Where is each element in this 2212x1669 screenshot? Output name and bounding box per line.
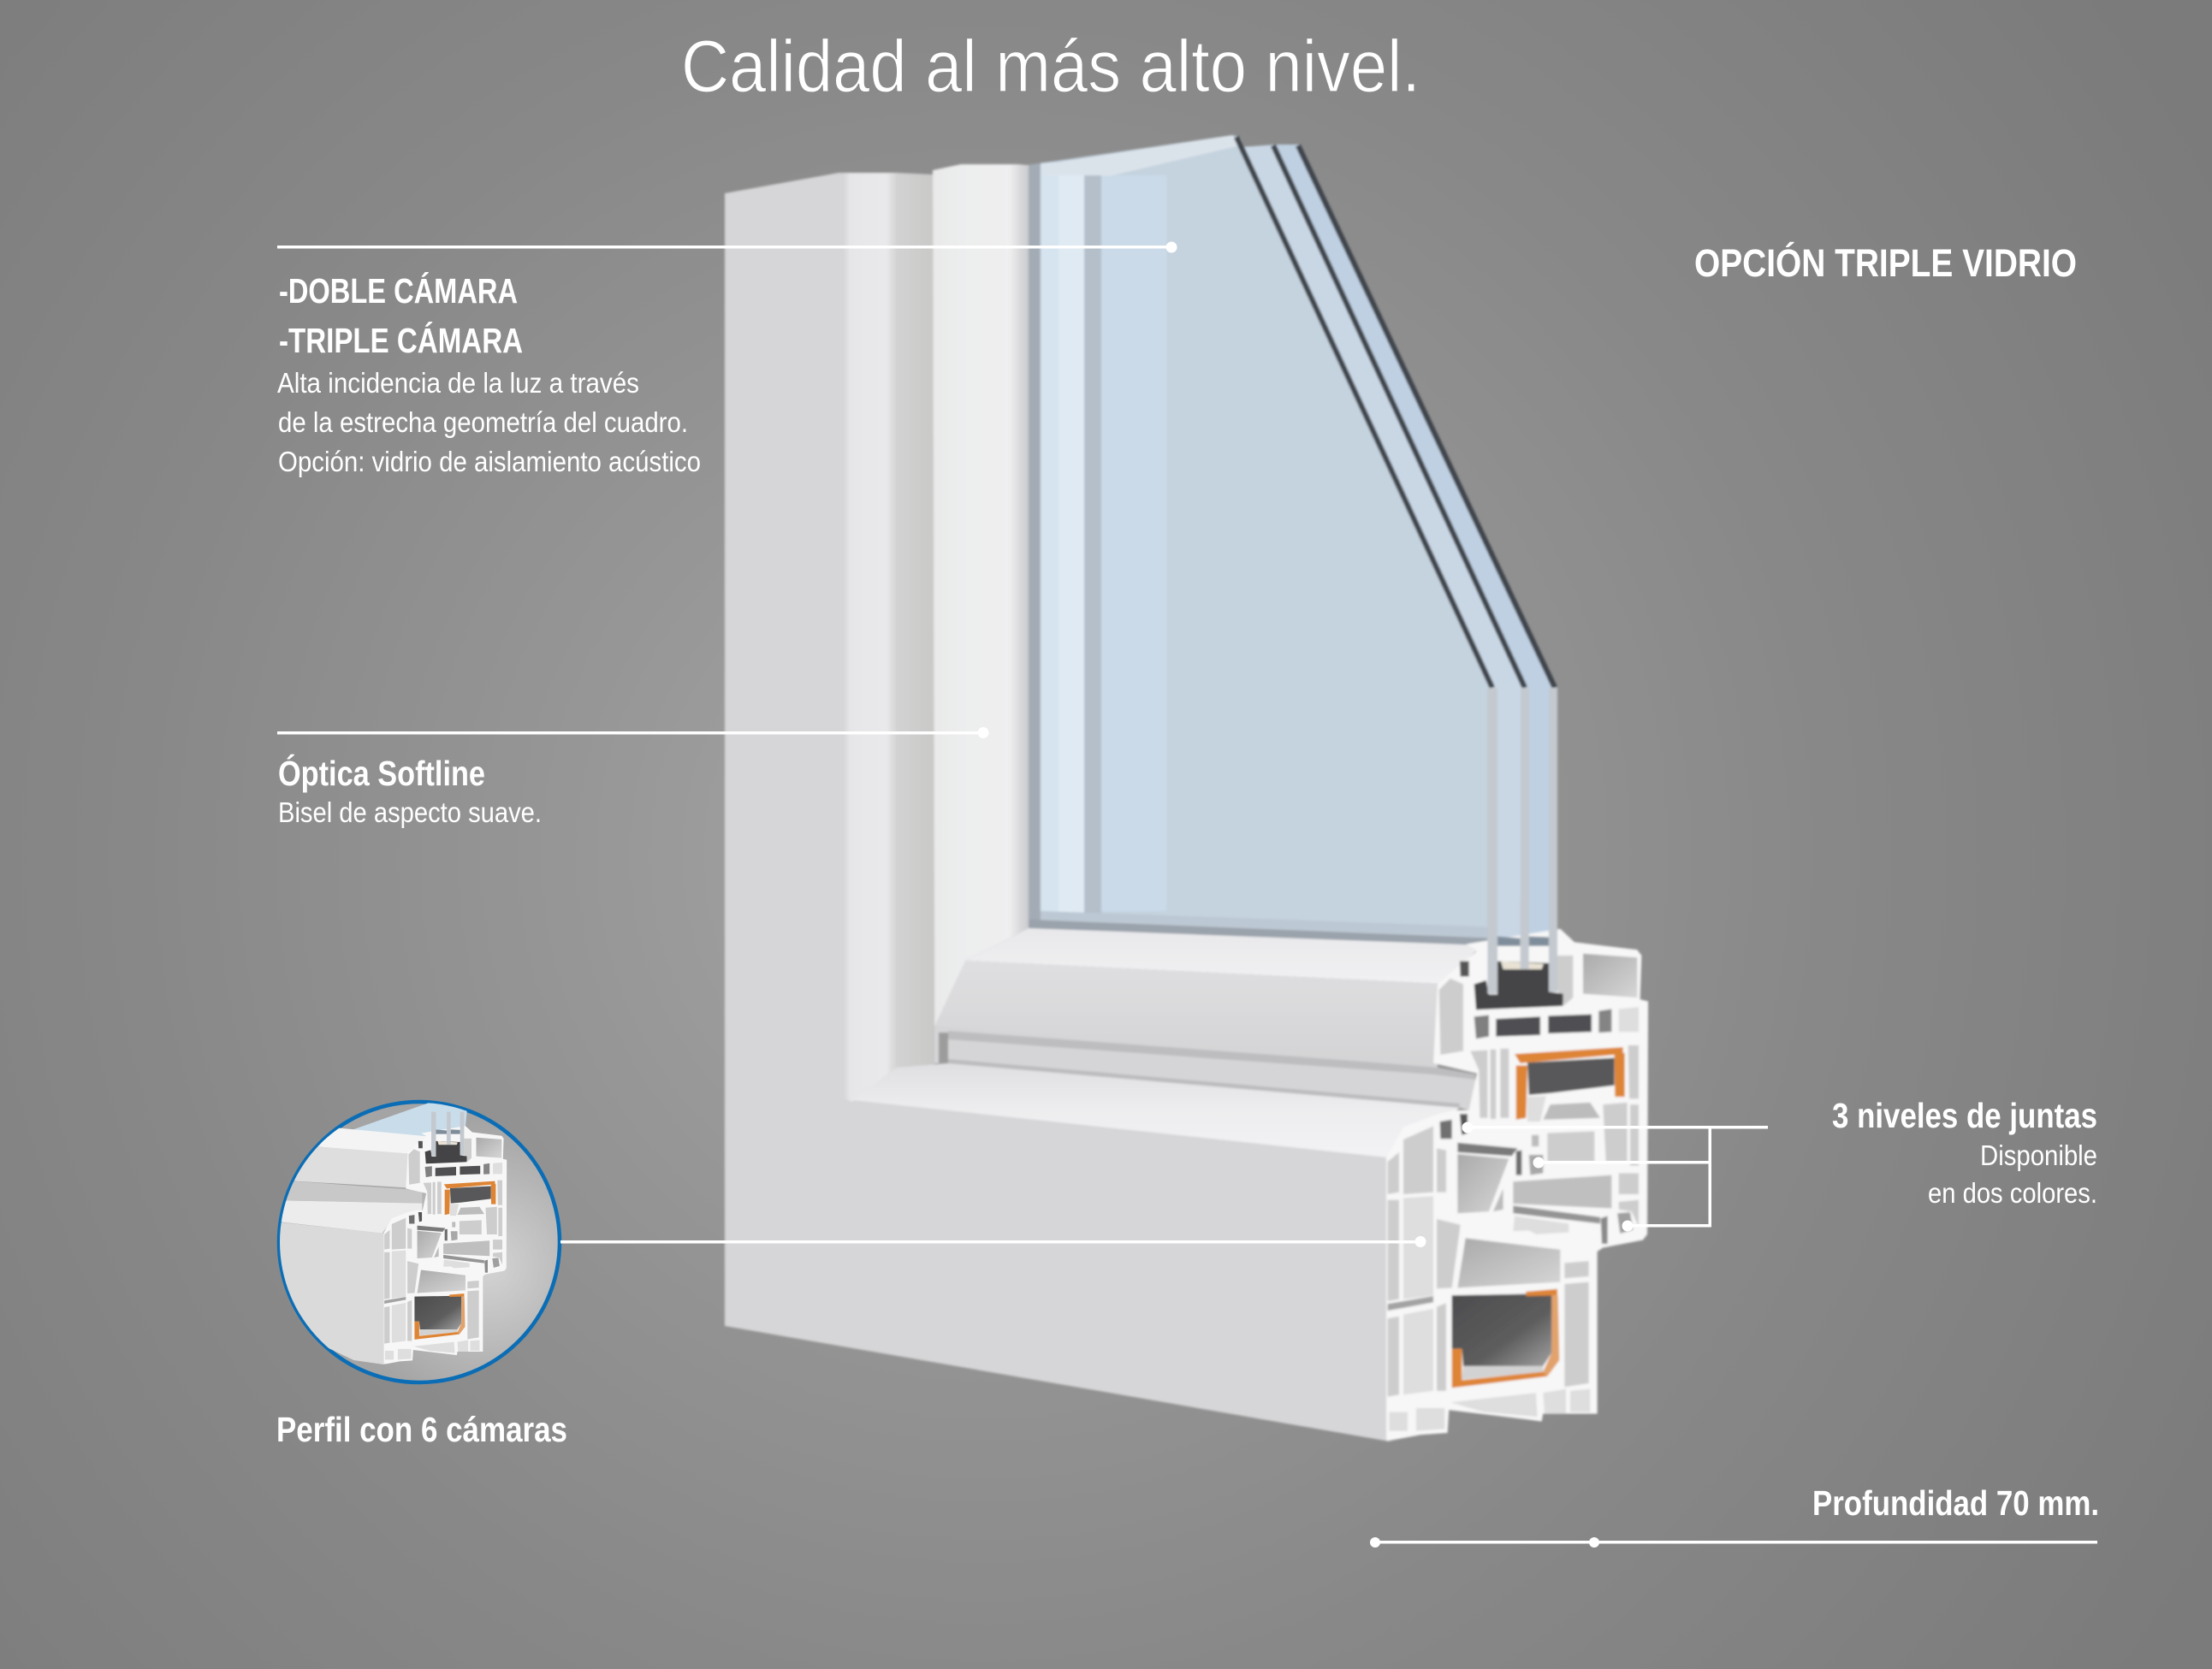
inset detail: 6-chamber profile — [276, 1102, 560, 1382]
callout: gaskets — [1462, 1096, 2097, 1232]
profile cross section — [1386, 898, 1648, 1441]
sash gap strip — [934, 1027, 1475, 1112]
frame face — [725, 173, 1390, 1441]
glass edges — [1236, 137, 1555, 688]
dimension line — [1370, 1537, 2097, 1548]
heading: -DOBLE CÁMARA — [279, 271, 518, 311]
leader line — [277, 727, 989, 738]
text block: glass description — [277, 367, 701, 477]
triple glass panes back — [1240, 145, 1557, 939]
description: Disponible — [1980, 1139, 2097, 1171]
description — [1928, 1139, 2097, 1209]
inset content — [276, 1102, 507, 1364]
window corner illustration — [725, 135, 1648, 1441]
callout: depth — [1370, 1483, 2099, 1548]
label: Profundidad 70 mm. — [1812, 1483, 2099, 1523]
frame vertical bevel — [844, 173, 934, 1102]
callout: profile chambers — [276, 1236, 1426, 1449]
inset disc — [279, 1102, 560, 1382]
text block: glass description: Alta incidencia de la luz a través — [277, 367, 639, 399]
leader line — [560, 1236, 1426, 1247]
sash horizontal face — [934, 961, 1441, 1068]
leader line — [277, 241, 1177, 253]
bracket lines — [1462, 1122, 1768, 1232]
sash vertical — [933, 164, 1029, 1027]
heading: triple glass option: OPCIÓN TRIPLE VIDRIO — [1694, 241, 2077, 285]
text block: glass description: Opción: vidrio de aislamiento acústico — [278, 446, 701, 477]
sash horizontal bevel — [965, 928, 1483, 984]
text block: glass description: de la estrecha geometría del cuadro. — [278, 406, 688, 438]
label: Perfil con 6 cámaras — [276, 1410, 567, 1449]
heading: 3 niveles de juntas — [1832, 1096, 2097, 1135]
description: en dos colores. — [1928, 1177, 2097, 1209]
glass front pane — [1028, 135, 1497, 948]
description: Bisel de aspecto suave. — [278, 796, 542, 828]
frame horizontal bevel — [852, 1063, 1460, 1157]
callout: glass — [277, 241, 1177, 311]
heading: -TRIPLE CÁMARA — [279, 321, 523, 360]
heading: Óptica Softline — [278, 754, 485, 793]
title: Calidad al más alto nivel. — [681, 26, 1420, 108]
callout: softline — [277, 727, 989, 828]
glass vertical sections — [1487, 688, 1557, 944]
